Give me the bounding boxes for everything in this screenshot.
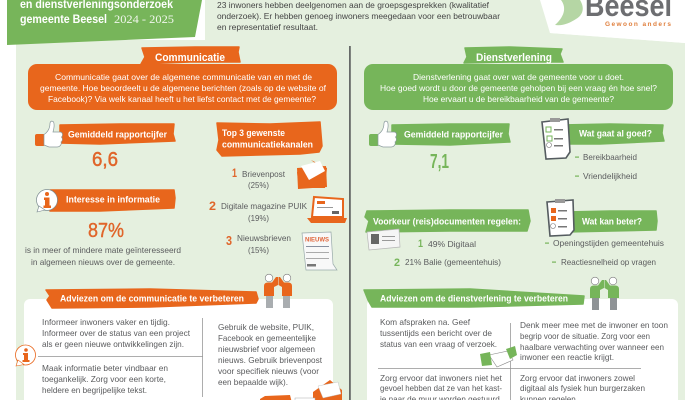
channel 1: (25%) bbox=[248, 181, 269, 190]
panel: adviezen dienstverlening bbox=[364, 289, 678, 400]
heading: adviezen dienstverlening: Adviezen om de dienstverlening te verbeteren bbox=[380, 294, 568, 304]
heading: adviezen communicatie bbox=[46, 289, 258, 308]
advice: vaker informeren: Informeer inwoners vaker en tijdig. bbox=[42, 318, 170, 327]
heading: adviezen dienstverlening bbox=[364, 289, 584, 307]
advice: vindbaar maken: Maak informatie beter vindbaar en bbox=[42, 364, 168, 373]
advice: vaker informeren bbox=[42, 318, 191, 349]
panel: communicatie introduction: Communicatie gaat over de algemene communicatie van en met de bbox=[55, 72, 312, 82]
document option 2: 2 bbox=[394, 257, 400, 269]
advice: kanalen gebruiken: nieuws. Gebruik brievenpost bbox=[218, 356, 323, 365]
channel 2: (19%) bbox=[248, 214, 269, 223]
advice: kanalen gebruiken: een bepaalde wijk). bbox=[218, 378, 288, 387]
document option 1: 1 bbox=[418, 238, 423, 250]
advice: meedenken bbox=[520, 321, 668, 362]
list: beter: Reactiesnelheid op vragen bbox=[561, 258, 656, 267]
advice: vindbaar maken bbox=[42, 364, 168, 395]
icon: orange thumbs up bbox=[35, 121, 62, 147]
advice: kanalen gebruiken: nieuwsbrief voor algemeen bbox=[218, 345, 315, 354]
panel: dienstverlening introduction: Hoe ervaart u de bereikbaarheid van de gemeente? bbox=[423, 94, 614, 104]
channel 3: Nieuwsbrieven bbox=[237, 234, 291, 243]
label: top 3 kanalen: communicatiekanalen bbox=[222, 140, 313, 150]
centre divider line bbox=[349, 46, 351, 400]
heading: Dienstverlening bbox=[464, 47, 563, 64]
icon: clipboard with checks bbox=[542, 118, 570, 159]
panel: adviezen communicatie bbox=[24, 289, 333, 400]
advice: kanalen gebruiken: Facebook en gemeentelijke bbox=[218, 334, 316, 343]
list: goed: Bereikbaarheid bbox=[583, 153, 637, 162]
icon: envelope bbox=[297, 160, 327, 189]
advice: niet doorsturen: gevoel hebben dat ze van het kast- bbox=[380, 384, 502, 393]
label: wat gaat al goed: Wat gaat al goed? bbox=[579, 128, 652, 140]
label: gemiddeld rapportcijfer communicatie bbox=[60, 124, 175, 144]
label: wat kan beter bbox=[565, 211, 657, 232]
panel: communicatie introduction: Facebook)? Via welk kanaal heeft u het liefst contact met de gemeente? bbox=[48, 94, 316, 104]
logo Beesel bbox=[540, 0, 700, 45]
list: beter: Openingstijden gemeentehuis bbox=[553, 239, 664, 248]
channel 3 bbox=[226, 233, 291, 255]
label: top 3 kanalen bbox=[217, 122, 322, 156]
icon: newspaper: NIEUWS bbox=[305, 236, 330, 244]
advice: afspraken nakomen: status van een vraag of verzoek. bbox=[380, 340, 497, 349]
icon: newspaper bbox=[302, 232, 337, 270]
channel 1: 1 bbox=[232, 166, 237, 180]
intro text: 23 inwoners hebben deelgenomen aan de groepsgesprekken (kwalitatief bbox=[217, 0, 490, 10]
document option 1: 49% Digitaal bbox=[428, 240, 476, 249]
icon: laptop in advice panel bbox=[260, 395, 315, 400]
channel 3: (15%) bbox=[248, 246, 269, 255]
panel: dienstverlening introduction bbox=[364, 64, 673, 110]
heading: Communicatie bbox=[141, 47, 240, 64]
number: 7,1: 7,1 bbox=[430, 151, 449, 173]
advice: vindbaar maken: toegankelijk. Zorg voor een korte, bbox=[42, 375, 166, 384]
channel 1 bbox=[232, 166, 286, 190]
icon: people high five orange bbox=[264, 274, 292, 308]
document option 1 bbox=[418, 238, 476, 250]
intro text: en representatief resultaat. bbox=[217, 22, 318, 32]
panel: communicatie introduction: gemeente. Hoe beoordeelt u de algemene berichten (zoals op de website of bbox=[40, 83, 327, 93]
advice: kanalen gebruiken bbox=[218, 323, 323, 387]
channel 3: 3 bbox=[226, 233, 232, 248]
icon: people high five green bbox=[590, 277, 619, 310]
label: voorkeur reisdocumenten bbox=[365, 210, 530, 232]
logo Beesel: Gewoon anders bbox=[605, 21, 671, 28]
interest description: in algemeen nieuws over de gemeente. bbox=[31, 258, 175, 267]
advice: kanalen gebruiken: voor specifiek nieuws (voor bbox=[218, 367, 319, 376]
list: beter bbox=[545, 239, 664, 267]
label: interesse in informatie: Interesse in informatie bbox=[66, 194, 160, 206]
advice: niet doorsturen bbox=[379, 374, 503, 400]
advice: kanalen gebruiken: Gebruik de website, PUIK, bbox=[218, 323, 314, 332]
advice: niet doorsturen: Zorg ervoor dat inwoners niet het bbox=[380, 374, 503, 383]
advice: meedenken: haalbare verwachting over wanneer een bbox=[520, 343, 664, 352]
advice: afspraken nakomen: tussentijds een bericht over de bbox=[380, 329, 492, 338]
panel: dienstverlening introduction: Dienstverlening gaat over wat de gemeente voor u doet. bbox=[413, 72, 624, 82]
title banner: 2024 - 2025 bbox=[114, 14, 174, 26]
icon: laptop bbox=[307, 197, 347, 223]
advice: afspraken nakomen bbox=[380, 318, 497, 349]
list: goed bbox=[575, 153, 637, 181]
number: 87%: 87% bbox=[88, 220, 124, 242]
advice: meedenken: inwoner een reactie krijgt. bbox=[520, 353, 614, 362]
icon: clipboard with crosses bbox=[547, 199, 574, 236]
advice: vindbaar maken: heldere en begrijpelijke tekst. bbox=[42, 386, 147, 395]
label: gemiddeld rapportcijfer dienstverlening bbox=[392, 124, 510, 145]
icon: info bubble bbox=[36, 190, 58, 212]
label: interesse in informatie bbox=[50, 190, 175, 211]
advice: meedenken: begrip voor de situatie. Zorg voor een bbox=[520, 332, 650, 341]
advice: meedenken: Denk meer mee met de inwoner en toon bbox=[520, 321, 668, 330]
document option 2 bbox=[394, 257, 501, 269]
label: wat gaat al goed bbox=[560, 124, 664, 144]
intro text bbox=[217, 0, 500, 32]
channel 2 bbox=[209, 199, 308, 223]
title banner: gemeente Beesel bbox=[20, 14, 107, 26]
channel 2: 2 bbox=[209, 199, 216, 213]
heading: adviezen communicatie: Adviezen om de communicatie te verbeteren bbox=[60, 294, 244, 304]
icon: id card bbox=[367, 229, 400, 250]
advice: digitaal en fysiek bbox=[520, 374, 645, 400]
panel: dienstverlening introduction: Hoe goed wordt u door de gemeente geholpen bij een vraag én hoe snel? bbox=[380, 83, 657, 93]
label: voorkeur reisdocumenten: Voorkeur (reis)documenten regelen: bbox=[373, 216, 521, 228]
advice: digitaal en fysiek: Zorg ervoor dat inwoners zowel bbox=[520, 374, 635, 383]
heading: Communicatie: Communicatie bbox=[155, 52, 225, 64]
label: gemiddeld rapportcijfer dienstverlening: Gemiddeld rapportcijfer bbox=[404, 130, 503, 140]
label: top 3 kanalen: Top 3 gewenste bbox=[222, 128, 285, 139]
advice: vaker informeren: als er geen nieuwe ontwikkelingen zijn. bbox=[42, 340, 184, 349]
channel 1: Brievenpost bbox=[242, 170, 286, 179]
channel 2: Digitale magazine PUIK bbox=[221, 202, 308, 211]
panel: communicatie introduction bbox=[28, 64, 337, 110]
intro text: onderzoek). Er hebben genoeg inwoners meegedaan voor een betrouwbaar bbox=[217, 11, 500, 21]
icon: envelope in advice panel bbox=[313, 380, 342, 400]
advice: digitaal en fysiek: digitaal als fysiek hun burgerzaken bbox=[520, 384, 645, 393]
advice: afspraken nakomen: Kom afspraken na. Geef bbox=[380, 318, 471, 327]
document option 2: 21% Balie (gemeentehuis) bbox=[405, 258, 501, 267]
label: wat kan beter: Wat kan beter? bbox=[582, 216, 642, 228]
icon: handshake bbox=[480, 346, 517, 367]
icon: info bubble in advice panel bbox=[16, 345, 36, 366]
advice: vaker informeren: Informeer over de status van een project bbox=[42, 329, 191, 338]
title banner bbox=[7, 0, 202, 45]
icon: green thumbs up bbox=[369, 121, 396, 147]
list: goed: Vriendelijkheid bbox=[583, 172, 637, 181]
heading: Dienstverlening: Dienstverlening bbox=[476, 52, 552, 64]
interest description: is in meer of mindere mate geïnteresseerd bbox=[25, 246, 181, 255]
interest description bbox=[25, 246, 181, 267]
label: gemiddeld rapportcijfer communicatie: Gemiddeld rapportcijfer bbox=[68, 130, 167, 140]
number: 6,6: 6,6 bbox=[92, 149, 118, 171]
